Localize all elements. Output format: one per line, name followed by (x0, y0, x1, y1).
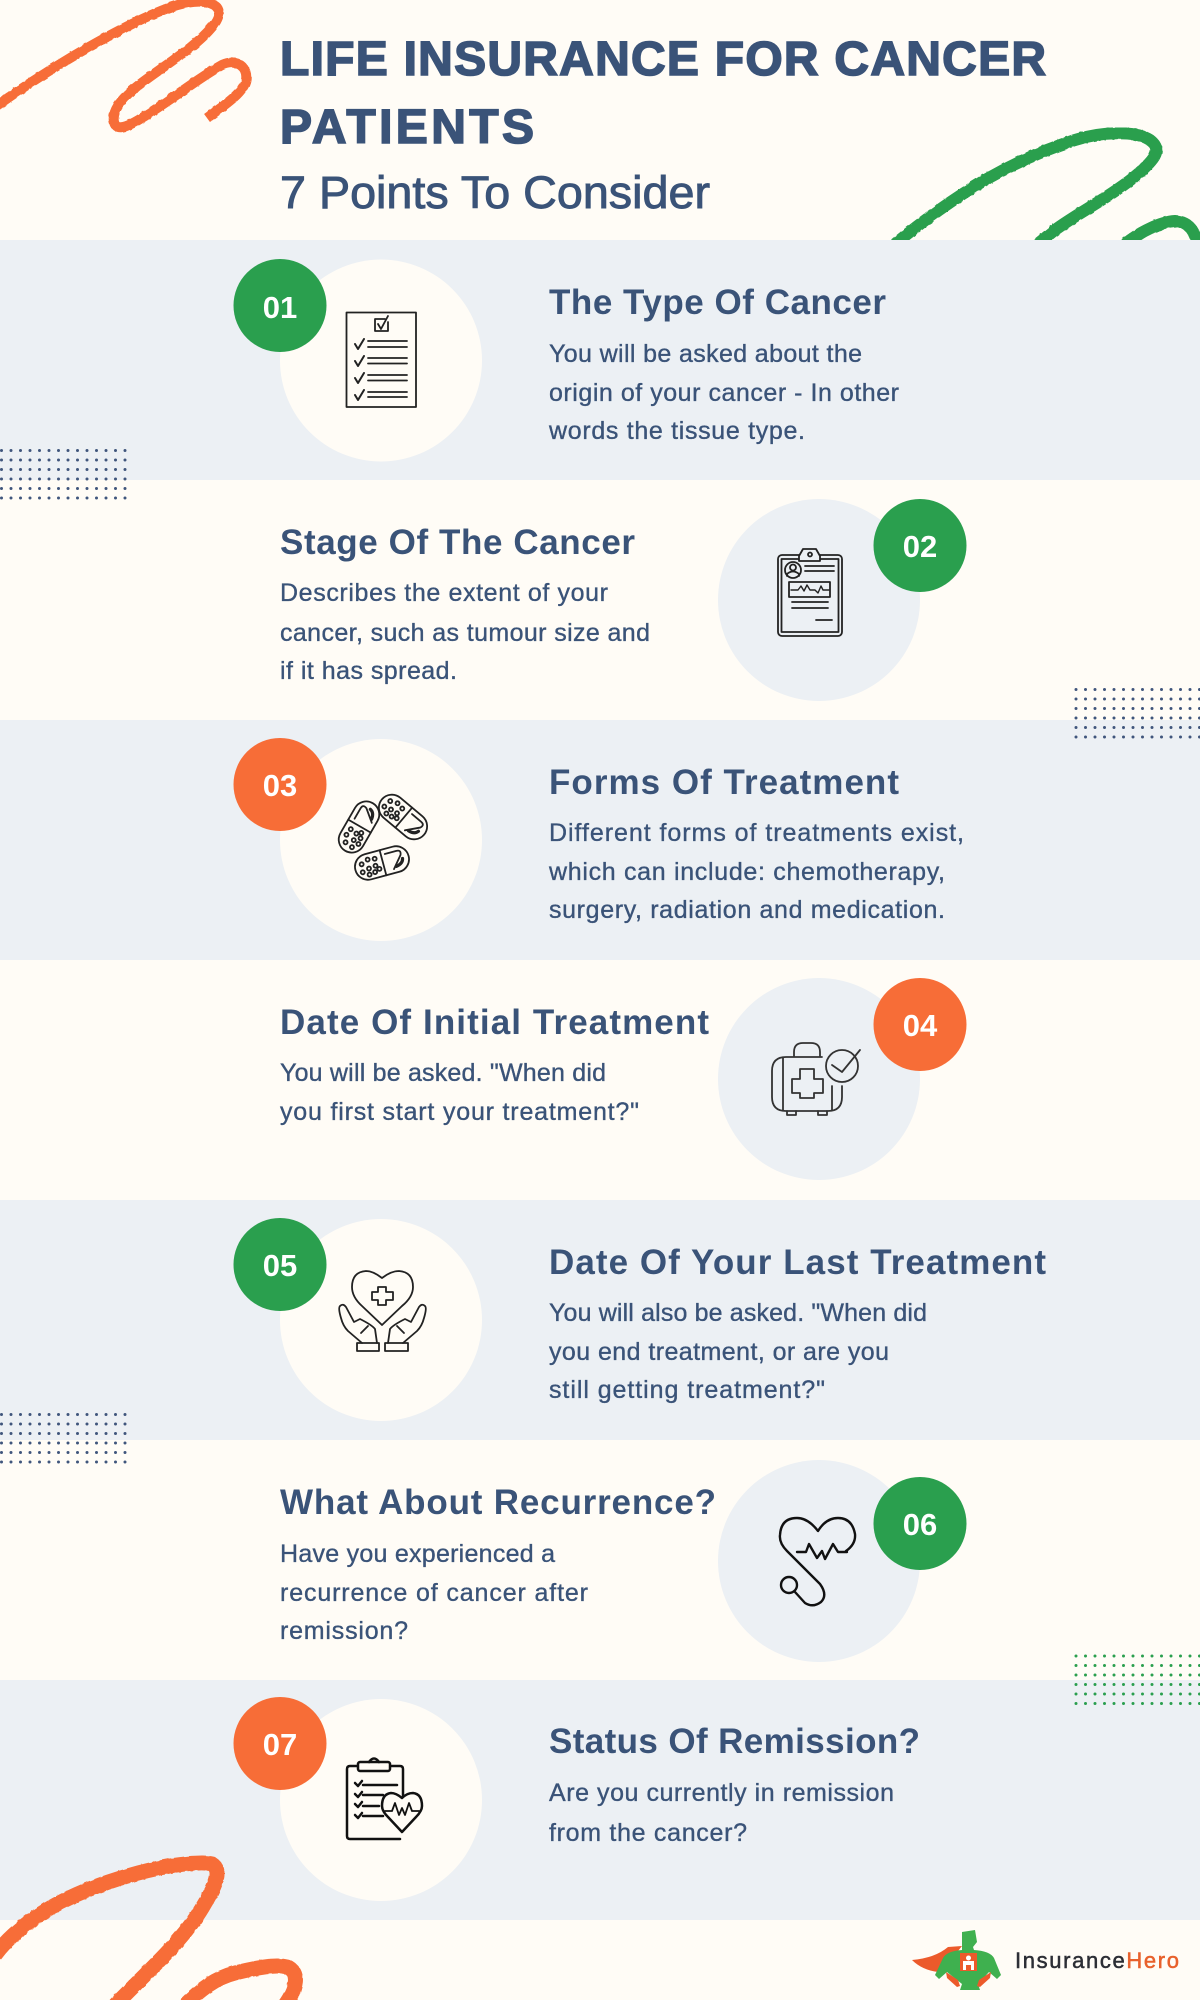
text block 05: still getting treatment?" (549, 1376, 825, 1404)
heading 02: Stage Of The Cancer (280, 523, 635, 562)
text block 01 (548, 340, 899, 445)
icon: medical case with check (772, 1043, 860, 1115)
text block 06 (280, 1540, 588, 1645)
text block 03: Different forms of treatments exist, (549, 819, 964, 847)
decorative scribble: green top right (895, 133, 1198, 246)
number badge 02: 02 (903, 529, 937, 564)
icon: stethoscope heart (780, 1518, 855, 1605)
icon: hands holding heart (339, 1271, 426, 1351)
heading 07: Status Of Remission? (549, 1722, 920, 1761)
text block 02: if it has spread. (280, 657, 457, 685)
panel: 07 status of remission (0, 1680, 1200, 1920)
number badge 02 (874, 499, 966, 592)
text block 03: which can include: chemotherapy, (548, 858, 945, 886)
text block 01: origin of your cancer - In other (549, 379, 899, 407)
heading 03: Forms Of Treatment (549, 763, 899, 802)
number badge 04 (874, 978, 966, 1071)
number badge 04: 04 (903, 1008, 938, 1043)
panel: 06 what about recurrence (0, 1440, 1200, 1680)
text block 07: from the cancer? (549, 1819, 747, 1847)
text block 07: Are you currently in remission (549, 1779, 894, 1807)
heading 04: Date Of Initial Treatment (280, 1003, 709, 1042)
text block 06: remission? (280, 1617, 408, 1645)
icon: superhero logo mark (912, 1930, 1001, 1990)
number badge 06: 06 (903, 1507, 937, 1542)
text block 05: You will also be asked. "When did (549, 1299, 927, 1327)
text block 04: You will be asked. "When did (280, 1059, 606, 1087)
text block 03: surgery, radiation and medication. (549, 896, 945, 924)
number badge 07 (234, 1697, 326, 1790)
text block 05: you end treatment, or are you (549, 1338, 889, 1366)
text block 01: You will be asked about the (549, 340, 862, 368)
panel: 01 the type of cancer (0, 240, 1200, 480)
number badge 05: 05 (263, 1248, 297, 1283)
number badge 03: 03 (263, 768, 297, 803)
text block 06: recurrence of cancer after (280, 1579, 588, 1607)
dot pattern: navy left upper (2, 450, 128, 498)
panel: 05 date of your last treatment (0, 1200, 1200, 1440)
text block 02: Describes the extent of your (280, 579, 608, 607)
text block 03 (548, 819, 964, 924)
number badge 05 (234, 1218, 326, 1311)
title (280, 33, 1046, 154)
decorative scribble: orange bottom left (0, 1863, 295, 2000)
text block 02: cancer, such as tumour size and (280, 619, 650, 647)
subtitle: 7 Points To Consider (280, 167, 710, 218)
text block 07 (549, 1779, 894, 1847)
text block 04: you first start your treatment?" (280, 1098, 639, 1126)
dot pattern: green right lower (1076, 1656, 1200, 1704)
title: PATIENTS (280, 101, 534, 154)
text block 02 (280, 579, 650, 685)
number badge 06 (874, 1477, 966, 1570)
heading 06: What About Recurrence? (280, 1483, 716, 1522)
panel: 04 date of initial treatment (0, 960, 1200, 1200)
title: LIFE INSURANCE FOR CANCER (280, 33, 1046, 86)
text block 01: words the tissue type. (548, 417, 805, 445)
text block 06: Have you experienced a (280, 1540, 555, 1568)
number badge 07: 07 (263, 1727, 297, 1762)
icon: capsules (334, 789, 432, 883)
decorative scribble: orange top left (0, 2, 246, 127)
logo wordmark: InsuranceHero (1015, 1948, 1179, 1973)
icon: medical clipboard (778, 549, 842, 636)
logo: InsuranceHero (912, 1930, 1179, 1990)
dot pattern: navy left lower (2, 1414, 128, 1462)
heading 01: The Type Of Cancer (549, 283, 886, 322)
number badge 03 (234, 738, 326, 831)
heading 05: Date Of Your Last Treatment (549, 1243, 1046, 1282)
dot pattern: navy right upper (1076, 690, 1200, 737)
panel: 03 forms of treatment (0, 720, 1200, 960)
text block 04 (280, 1059, 639, 1126)
panel: 02 stage of the cancer (0, 480, 1200, 720)
text block 05 (549, 1299, 927, 1404)
number badge 01 (234, 259, 326, 352)
number badge 01: 01 (263, 290, 297, 325)
icon: clipboard with heart (347, 1758, 422, 1839)
icon: checklist document (346, 312, 416, 407)
